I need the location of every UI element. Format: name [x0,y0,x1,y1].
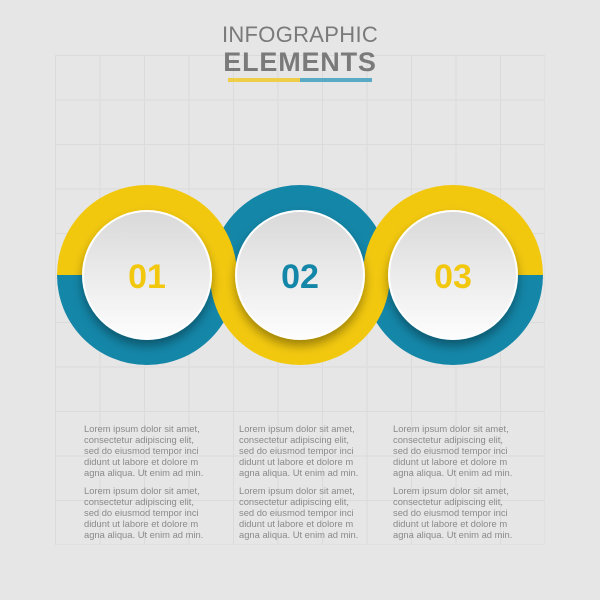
text column 3: consectetur adipiscing elit, [393,434,503,445]
circle 01: 01 [128,258,166,296]
text column 3: didunt ut labore et dolore m [393,518,507,529]
text column 3: didunt ut labore et dolore m [393,456,507,467]
text column 3: sed do eiusmod tempor inci [393,445,508,456]
text column 3: agna aliqua. Ut enim ad min. [393,467,512,478]
text column 1: consectetur adipiscing elit, [84,434,194,445]
text column 2 [239,423,358,540]
text column 1: consectetur adipiscing elit, [84,496,194,507]
text column 2: didunt ut labore et dolore m [239,456,353,467]
text column 2: didunt ut labore et dolore m [239,518,353,529]
title [222,22,378,77]
circle 03 [388,210,518,340]
text column 3: sed do eiusmod tempor inci [393,507,508,518]
text column 2: sed do eiusmod tempor inci [239,507,354,518]
text column 2: sed do eiusmod tempor inci [239,445,354,456]
text column 1: agna aliqua. Ut enim ad min. [84,529,203,540]
text column 1: didunt ut labore et dolore m [84,518,198,529]
text column 3: Lorem ipsum dolor sit amet, [393,423,509,434]
text column 2: agna aliqua. Ut enim ad min. [239,467,358,478]
circle 02 [235,210,365,340]
text column 2: consectetur adipiscing elit, [239,496,349,507]
text column 1: sed do eiusmod tempor inci [84,507,199,518]
text column 1 [84,423,203,540]
title: INFOGRAPHIC [222,22,378,47]
text column 3 [393,423,512,540]
text column 1: sed do eiusmod tempor inci [84,445,199,456]
text column 2: Lorem ipsum dolor sit amet, [239,423,355,434]
text column 1: didunt ut labore et dolore m [84,456,198,467]
title: ELEMENTS [223,47,377,77]
text column 3: agna aliqua. Ut enim ad min. [393,529,512,540]
text column 3: Lorem ipsum dolor sit amet, [393,485,509,496]
text column 2: agna aliqua. Ut enim ad min. [239,529,358,540]
text column 2: Lorem ipsum dolor sit amet, [239,485,355,496]
text column 1: Lorem ipsum dolor sit amet, [84,485,200,496]
circle 02: 02 [281,258,319,296]
circle 03: 03 [434,258,472,296]
text column 3: consectetur adipiscing elit, [393,496,503,507]
circle 01 [82,210,212,340]
text column 1: Lorem ipsum dolor sit amet, [84,423,200,434]
text column 2: consectetur adipiscing elit, [239,434,349,445]
text column 1: agna aliqua. Ut enim ad min. [84,467,203,478]
title underline bar [228,78,372,82]
